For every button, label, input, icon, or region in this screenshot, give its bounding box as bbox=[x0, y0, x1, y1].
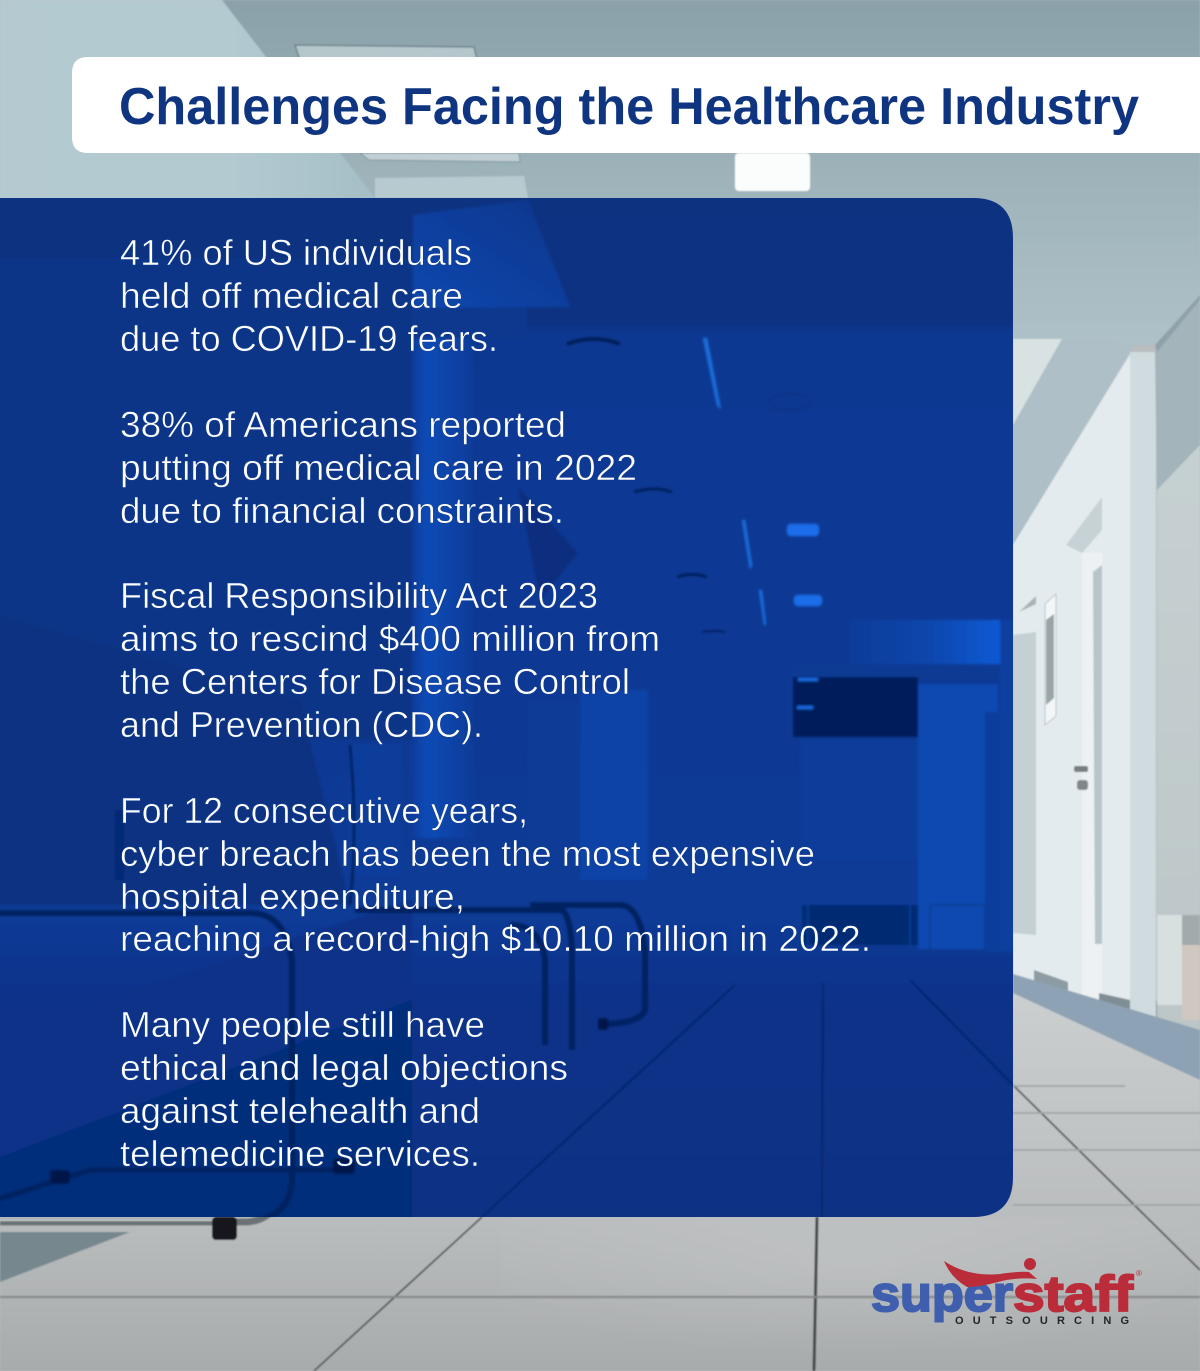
stat: telehealth objections: Many people still have bbox=[120, 1004, 485, 1045]
left wall bbox=[0, 0, 375, 340]
logo: superstaff outsourcing: ® bbox=[1136, 1269, 1142, 1278]
ceiling bbox=[0, 0, 1200, 345]
stat: telehealth objections bbox=[120, 1004, 568, 1174]
floor lines bbox=[482, 980, 1013, 1217]
column bbox=[1130, 352, 1156, 1020]
stat: cyber breach: cyber breach has been the most expensive bbox=[120, 833, 815, 874]
white wall with doors bbox=[1013, 354, 1157, 1020]
floor bbox=[0, 975, 1200, 1371]
pillar bright band bbox=[412, 338, 472, 838]
ceiling seam highlights bbox=[703, 338, 766, 625]
waiting room chairs bbox=[0, 745, 645, 1222]
stat: financial constraints: putting off medical care in 2022 bbox=[120, 447, 637, 488]
logo: superstaff outsourcing: OUTSOURCING bbox=[955, 1315, 1129, 1327]
ceiling fixtures bbox=[567, 339, 811, 632]
blue ceiling lights bbox=[787, 524, 822, 606]
stat: telehealth objections: ethical and legal objections bbox=[120, 1047, 568, 1088]
ceiling vent bbox=[295, 45, 477, 60]
logo: superstaff outsourcing: staff bbox=[1013, 1266, 1133, 1322]
stat: cyber breach: reaching a record-high $10.10 million in 2022. bbox=[120, 918, 871, 959]
stat: Fiscal Responsibility Act: and Prevention (CDC). bbox=[120, 704, 483, 745]
wheelchair rail and caster bbox=[0, 1200, 280, 1240]
stat: COVID-19 fears: held off medical care bbox=[120, 275, 463, 316]
stat: Fiscal Responsibility Act: Fiscal Responsibility Act 2023 bbox=[120, 575, 598, 616]
blue text panel bbox=[0, 180, 1040, 1240]
stat: financial constraints: 38% of Americans reported bbox=[120, 404, 566, 445]
left wall tint bbox=[0, 332, 412, 1217]
logo: superstaff outsourcing bbox=[871, 1258, 1142, 1327]
logo: superstaff outsourcing: super bbox=[871, 1266, 1013, 1322]
floor tile lines bbox=[0, 1085, 1200, 1371]
floor shadow wedge bbox=[0, 1232, 130, 1282]
stat: cyber breach: hospital expenditure, bbox=[120, 876, 465, 917]
glass partition bbox=[1155, 295, 1200, 1030]
stat: Fiscal Responsibility Act: aims to rescind $400 million from bbox=[120, 618, 660, 659]
stat: Fiscal Responsibility Act: the Centers for Disease Control bbox=[120, 661, 630, 702]
title banner bbox=[72, 57, 1200, 153]
stat: telehealth objections: against telehealth and bbox=[120, 1090, 480, 1131]
corridor end dark doorway bbox=[793, 677, 918, 945]
right side ceiling cove bbox=[1013, 339, 1062, 425]
stat: financial constraints: due to financial constraints. bbox=[120, 490, 564, 531]
stat: COVID-19 fears: 41% of US individuals bbox=[120, 232, 472, 273]
end of corridor bright wall bbox=[862, 618, 1013, 952]
stat: cyber breach: For 12 consecutive years, bbox=[120, 790, 528, 831]
ceiling light bbox=[735, 153, 810, 191]
stat: COVID-19 fears bbox=[120, 232, 498, 359]
door panels and dark side wall bbox=[350, 487, 648, 880]
stat: telehealth objections: telemedicine services. bbox=[120, 1133, 480, 1174]
title: Challenges Facing the Healthcare Industry bbox=[119, 78, 1139, 136]
stat: Fiscal Responsibility Act bbox=[120, 575, 660, 745]
stat: COVID-19 fears: due to COVID-19 fears. bbox=[120, 318, 498, 359]
chair casters bbox=[50, 1018, 608, 1184]
stat: cyber breach bbox=[120, 790, 871, 959]
background chairs bbox=[806, 904, 986, 949]
stat: financial constraints bbox=[120, 404, 637, 531]
